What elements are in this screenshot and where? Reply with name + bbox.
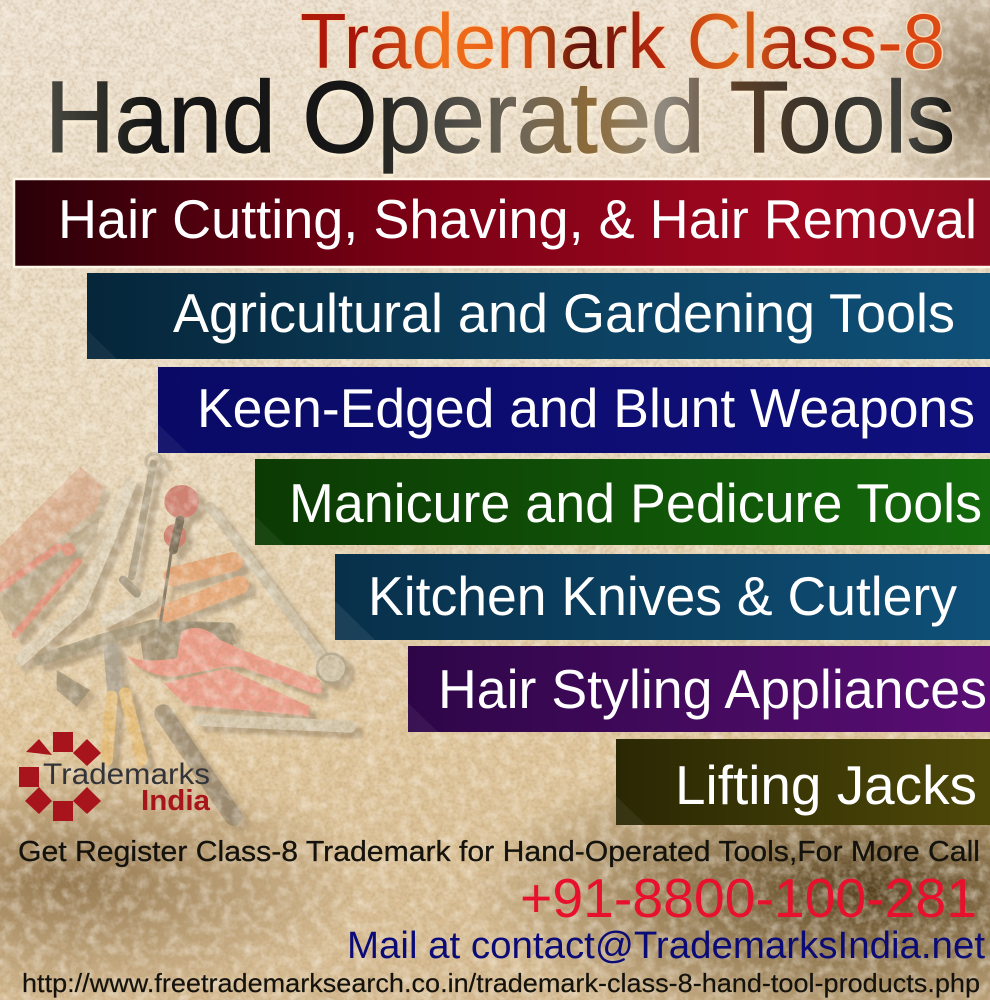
band: hair styling: Hair Styling Appliances [438,658,987,720]
band: hair cutting [14,179,990,267]
logo wordmark: Trademarks [43,758,210,791]
band: hair styling [408,646,990,732]
heading: Hand Operated Tools: Hand Operated Tools [45,62,955,174]
email: Mail at contact@TrademarksIndia.net [347,925,985,967]
website url: http://www.freetrademarksearch.co.in/trademark-class-8-hand-tool-products.php [22,968,980,998]
band: manicure: Manicure and Pedicure Tools [289,472,982,534]
faded hand tools illustration [0,454,350,817]
socket handle [210,507,346,683]
band: agricultural tools: Agricultural and Gardening Tools [173,282,955,344]
band: hair cutting: Hair Cutting, Shaving, & Hair Removal [58,188,977,250]
adjustable spanner [57,670,350,817]
long pliers and wrench [20,454,230,660]
screwdriver [157,485,199,647]
logo: Trademarks India [19,732,211,821]
wide red-handled tool at left [0,467,103,640]
band: lifting jacks [616,739,990,825]
red pruning shears [127,622,322,717]
orange handles [167,562,240,613]
logo sub-wordmark: India [141,785,211,817]
band: kitchen knives: Kitchen Knives & Cutlery [368,565,957,627]
call to action: Get Register Class-8 Trademark for Hand-Operated Tools,For More Call [18,836,980,868]
band: lifting jacks: Lifting Jacks [675,754,977,816]
band: agricultural tools [87,273,990,359]
band: manicure [255,459,990,545]
logo mark [19,732,101,821]
band: kitchen knives [335,554,990,640]
band: weapons: Keen-Edged and Blunt Weapons [197,377,975,439]
yellow cutters [107,650,142,760]
phone number: +91-8800-100-281 [520,867,977,929]
band: weapons [158,367,990,453]
